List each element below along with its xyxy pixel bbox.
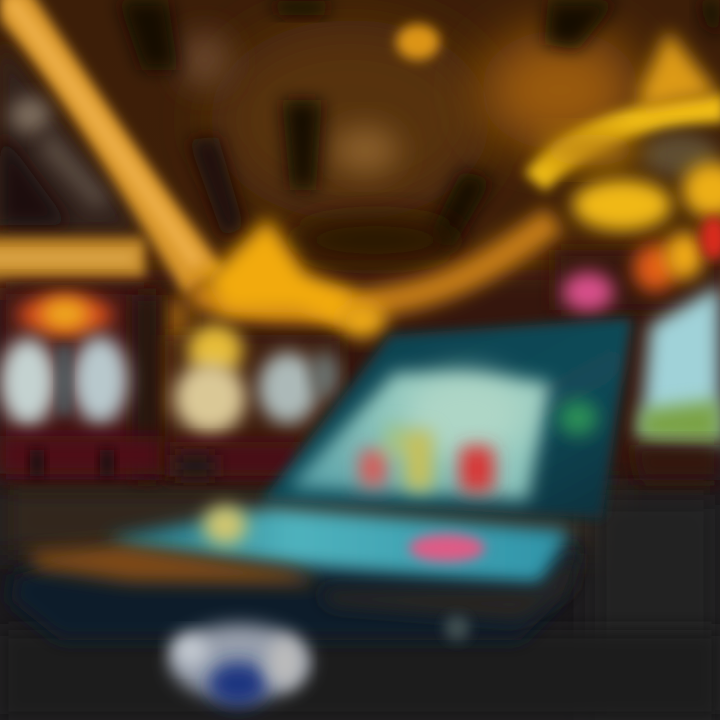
orange front edge	[30, 544, 320, 584]
right screen	[632, 285, 720, 480]
slot machine: center pair	[165, 324, 340, 477]
colored lights	[555, 216, 720, 312]
laptop display	[288, 372, 550, 500]
keyboard highlight	[203, 505, 247, 545]
laptop screen bezel	[262, 318, 632, 518]
ceiling: warm glow and dark recesses	[118, 0, 720, 264]
trackpad spot	[444, 615, 470, 641]
yellow chandelier ring	[535, 30, 720, 231]
green screen glow	[558, 400, 598, 436]
laptop	[10, 318, 632, 641]
front lip	[320, 550, 580, 620]
display highlight	[405, 373, 525, 457]
laptop keyboard	[108, 507, 570, 585]
foreground object: chips	[170, 624, 310, 706]
left wall panel	[0, 40, 140, 232]
laptop base	[10, 545, 580, 640]
slot symbols	[360, 425, 494, 492]
pink key	[409, 534, 485, 562]
gold ceiling beams	[0, 0, 555, 420]
slot machine: left pair	[0, 288, 165, 480]
